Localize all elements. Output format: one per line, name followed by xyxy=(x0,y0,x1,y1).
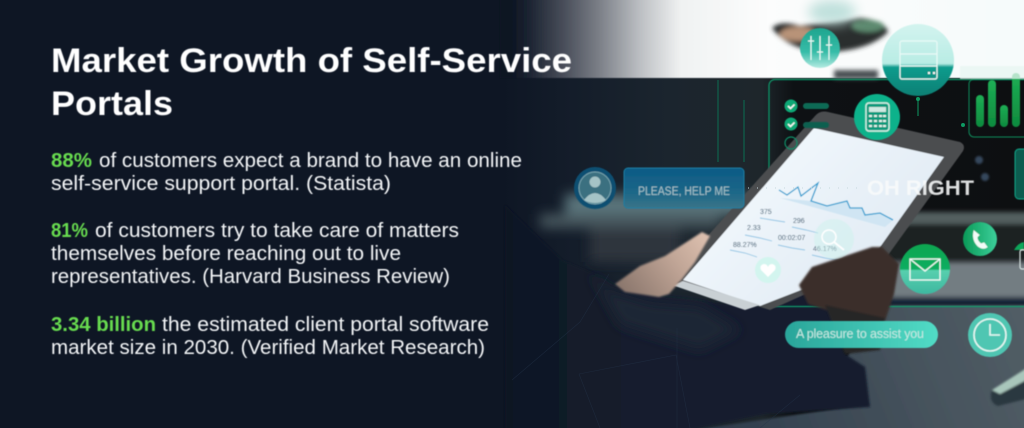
band highlight over widgets xyxy=(960,66,1024,79)
stat: 88 percent xyxy=(51,150,522,195)
tablet stat numbers: 46.17% xyxy=(813,246,837,253)
photo: table surface xyxy=(680,305,1024,428)
hud connector xyxy=(916,98,964,126)
photo: dark room background xyxy=(500,78,1024,428)
speech bubble: please help me xyxy=(624,168,744,208)
speech bubble: a pleasure to assist you xyxy=(785,321,938,348)
photo: right-side wall strips xyxy=(882,212,1024,305)
photo: blurred desk objects left of tablet xyxy=(540,194,750,262)
icon: server xyxy=(882,24,954,96)
speech bubble: please help me: PLEASE, HELP ME xyxy=(638,186,730,198)
tablet stat numbers: 88.27% xyxy=(733,242,757,249)
photo: top bright window band xyxy=(500,0,1024,78)
icon: sliders xyxy=(800,28,840,68)
side widget xyxy=(1015,149,1024,199)
decorative constellation lines xyxy=(512,274,800,428)
tablet stat numbers: 00:02:07 xyxy=(778,235,805,242)
tablet lower bezel xyxy=(672,281,760,310)
icon: clock xyxy=(968,313,1012,357)
stat: 81 percent: themselves before reaching out to live xyxy=(51,243,401,265)
speech bubble: a pleasure to assist you: A pleasure to assist you xyxy=(796,327,924,341)
icon: heart xyxy=(755,257,781,283)
right hand xyxy=(799,247,899,321)
blurred dots xyxy=(975,156,989,181)
icon: person xyxy=(574,167,616,209)
dotted connector xyxy=(748,187,864,189)
stat: 81 percent xyxy=(51,220,459,288)
tablet stat numbers xyxy=(733,209,837,253)
tablet stat numbers: 296 xyxy=(793,218,805,225)
tablet sparklines xyxy=(730,218,838,260)
bar chart widget xyxy=(969,73,1024,137)
title: Portals xyxy=(51,85,173,123)
tablet stat numbers: 375 xyxy=(760,209,772,216)
photo: haze in window xyxy=(808,0,856,24)
stat: 3.34 billion: the estimated client portal software xyxy=(162,314,489,336)
photo: blurred hands in window xyxy=(772,18,888,79)
stat: 3.34 billion xyxy=(51,314,489,359)
icon: search xyxy=(814,219,854,259)
icon: mail xyxy=(900,244,950,294)
stat: 88 percent: of customers expect a brand to have an online xyxy=(99,150,522,172)
hands xyxy=(615,232,899,354)
tablet chart area xyxy=(780,198,893,227)
hud vertical lines xyxy=(718,80,744,162)
photo: person using tablet at a desk xyxy=(500,0,1024,428)
stat: 88 percent: self-service support portal. (Statista) xyxy=(51,173,391,195)
stat: 81 percent: representatives. (Harvard Business Review) xyxy=(51,266,450,288)
stat: 3.34 billion: market size in 2030. (Verified Market Research) xyxy=(51,337,485,359)
label: oh right: OH RIGHT xyxy=(867,177,974,200)
tablet line chart xyxy=(779,183,893,220)
side icon: partial tablet xyxy=(1014,242,1024,269)
tablet stat numbers: 2.33 xyxy=(747,225,761,232)
hud frame xyxy=(769,80,1024,306)
title: Market Growth of Self-Service xyxy=(51,42,572,80)
left hand xyxy=(615,232,710,297)
photo: phone on table xyxy=(991,366,1024,406)
stat: 81 percent: of customers try to take care of matters xyxy=(95,220,459,242)
stat: 3.34 billion: 3.34 billion xyxy=(51,314,156,336)
icon: phone xyxy=(963,222,997,256)
title xyxy=(51,42,572,123)
photo: arm highlight xyxy=(590,272,740,350)
right wrist xyxy=(825,305,885,354)
photo: person sleeve xyxy=(505,205,870,428)
checklist xyxy=(784,100,829,149)
tablet body xyxy=(670,112,964,310)
tablet screen xyxy=(683,128,944,306)
stat: 81 percent: 81% xyxy=(51,220,88,242)
tablet xyxy=(670,112,964,310)
stat: 88 percent: 88% xyxy=(51,150,92,172)
icon: calculator xyxy=(854,94,900,140)
